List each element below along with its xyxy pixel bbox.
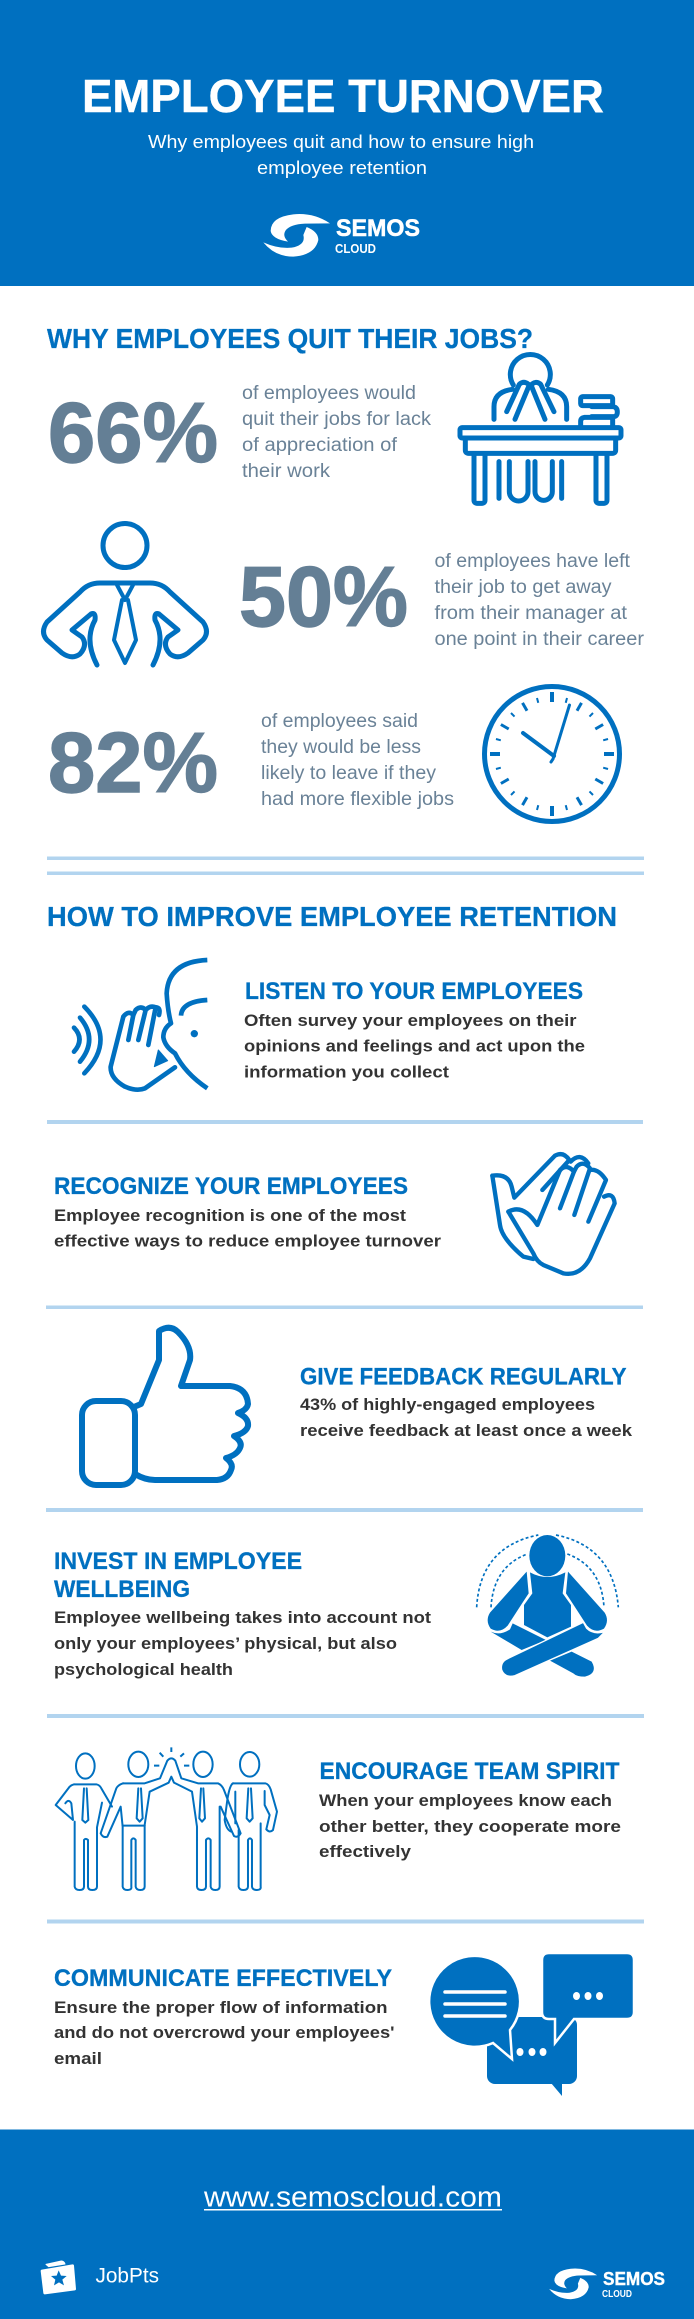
section: listen: LISTEN TO YOUR EMPLOYEES <box>245 978 583 1005</box>
stat text: 66%: quit their jobs for lack <box>242 409 432 430</box>
section: team spirit: other better, they cooperate more <box>319 1818 621 1836</box>
section: recognize: Employee recognition is one of the most <box>54 1207 407 1225</box>
brand: JobPts: JobPts <box>96 2264 159 2288</box>
stat text: 82%: of employees said <box>261 711 418 732</box>
stat: 66%: 66% <box>48 386 218 481</box>
icon: thumbs up <box>82 1328 248 1485</box>
icon: clock <box>484 686 620 822</box>
stat text: 50%: of employees have left <box>434 551 631 572</box>
section: team spirit <box>319 1758 621 1861</box>
section: wellbeing: only your employees’ physical, but also <box>54 1635 397 1653</box>
subtitle <box>148 132 534 178</box>
stat text: 50% <box>434 551 645 650</box>
title: EMPLOYEE TURNOVER <box>82 70 604 122</box>
icon: team high five <box>56 1747 277 1890</box>
section: wellbeing <box>54 1548 432 1679</box>
stat: 66% <box>48 383 432 482</box>
icon: clapping hands <box>492 1154 615 1274</box>
section: wellbeing: WELLBEING <box>54 1576 190 1603</box>
section: wellbeing: Employee wellbeing takes into account not <box>54 1609 432 1627</box>
section: communicate: COMMUNICATE EFFECTIVELY <box>54 1965 392 1992</box>
panel: footer <box>0 2130 694 2319</box>
section: listen: Often survey your employees on their <box>244 1012 577 1030</box>
stat: 82% <box>48 711 454 811</box>
stat: 50%: 50% <box>239 550 408 645</box>
section: team spirit: ENCOURAGE TEAM SPIRIT <box>320 1758 620 1785</box>
logo: Semos Cloud <box>263 214 420 257</box>
section: team spirit: effectively <box>319 1843 412 1861</box>
section: feedback: 43% of highly-engaged employees <box>300 1396 595 1414</box>
heading: why employees quit: WHY EMPLOYEES QUIT THEIR JOBS? <box>47 323 533 354</box>
section: communicate <box>54 1965 395 2068</box>
stat text: 66%: of appreciation of <box>242 435 398 456</box>
section: listen: opinions and feelings and act upon the <box>244 1038 585 1056</box>
icon: chat bubbles <box>429 1953 634 2096</box>
logo: Semos Cloud: SEMOS <box>336 215 420 242</box>
logo: Semos Cloud footer <box>549 2268 665 2300</box>
section: wellbeing: INVEST IN EMPLOYEE <box>54 1548 302 1575</box>
icon: manager with hands on hips <box>44 524 206 665</box>
section: feedback <box>300 1364 633 1440</box>
section: listen <box>244 978 585 1082</box>
stat text: 50%: one point in their career <box>434 629 645 650</box>
section: communicate: email <box>54 2050 102 2068</box>
stat: 82%: 82% <box>48 716 218 811</box>
subtitle: Why employees quit and how to ensure high <box>148 132 534 152</box>
icon: listening ear <box>74 960 207 1090</box>
stat text: 50%: their job to get away <box>434 577 612 598</box>
stat: 50% <box>239 550 645 650</box>
section: wellbeing: psychological health <box>54 1661 233 1679</box>
section: recognize: effective ways to reduce employee turnover <box>54 1232 442 1250</box>
stat text: 66%: their work <box>242 461 331 482</box>
heading: how to improve: HOW TO IMPROVE EMPLOYEE RETENTION <box>47 901 617 932</box>
section: feedback: receive feedback at least once a week <box>300 1422 633 1440</box>
icon: JobPts logo <box>42 2261 75 2293</box>
logo: Semos Cloud footer: SEMOS <box>603 2268 665 2289</box>
subtitle: employee retention <box>257 158 427 178</box>
section: recognize <box>54 1173 442 1250</box>
stat text: 50%: from their manager at <box>434 603 628 624</box>
section: feedback: GIVE FEEDBACK REGULARLY <box>300 1364 626 1390</box>
stat text: 82%: had more flexible jobs <box>261 789 454 810</box>
website link: www.semoscloud.com <box>203 2182 502 2214</box>
panel: header <box>0 0 694 286</box>
stat text: 82%: likely to leave if they <box>261 763 437 784</box>
stat text: 82%: they would be less <box>261 737 421 758</box>
stat text: 66%: of employees would <box>242 383 416 404</box>
section: listen: information you collect <box>244 1064 450 1082</box>
icon: stressed person at desk <box>460 354 621 503</box>
stat text: 82% <box>261 711 454 810</box>
section: communicate: Ensure the proper flow of information <box>54 1999 388 2017</box>
logo: Semos Cloud: CLOUD <box>335 241 376 256</box>
section: communicate: and do not overcrowd your employees' <box>54 2024 395 2042</box>
logo: Semos Cloud footer: CLOUD <box>602 2289 632 2300</box>
section: team spirit: When your employees know each <box>319 1792 612 1810</box>
icon: meditating person <box>477 1535 618 1677</box>
section: recognize: RECOGNIZE YOUR EMPLOYEES <box>54 1173 408 1200</box>
stat text: 66% <box>242 383 432 482</box>
